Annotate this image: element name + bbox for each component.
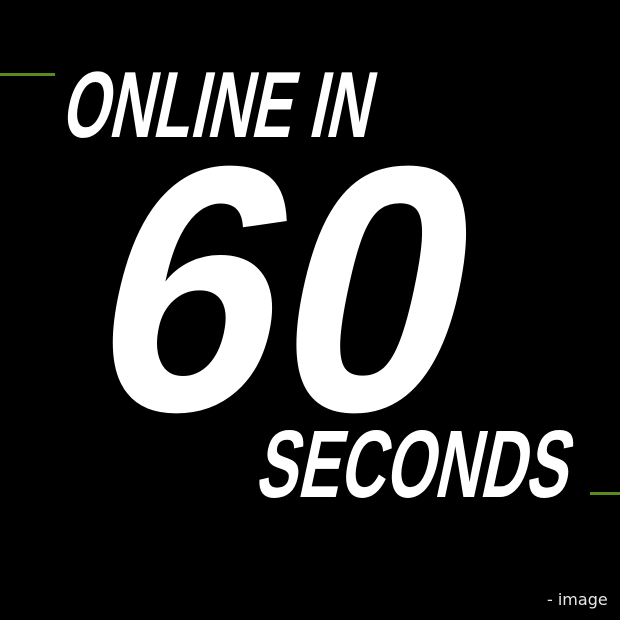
accent line: bottom right: [590, 492, 620, 495]
big number: 60: 60: [66, 95, 514, 485]
heading: ONLINE IN: ONLINE IN: [56, 53, 386, 158]
accent line: top left: [0, 73, 55, 76]
caption: - image: [547, 590, 608, 609]
